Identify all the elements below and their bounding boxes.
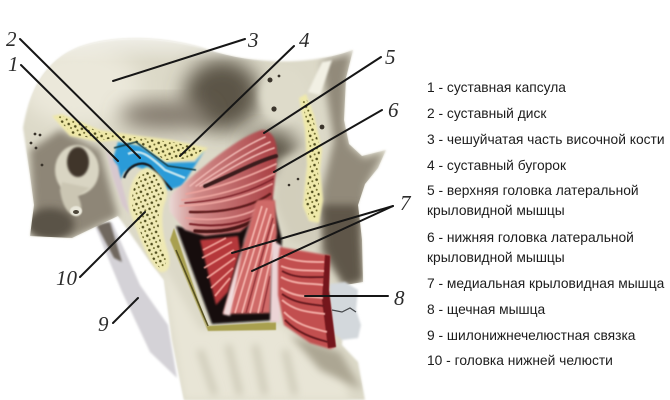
legend: 4 - суставный бугорок [427,158,567,173]
buccinator muscle [278,247,336,349]
number labels on the drawing: 6 [388,98,399,122]
legend: крыловидной мышцы [427,203,565,218]
mandibular head [129,167,170,272]
number labels on the drawing [6,27,412,336]
legend: 10 - головка нижней челюсти [427,353,613,368]
lateral pterygoid upper and lower heads [169,130,277,236]
illustration: skull anatomy [0,30,386,400]
number labels on the drawing: 10 [56,266,78,290]
teeth [330,282,361,340]
legend: 7 - медиальная крыловидная мышца [427,276,665,291]
temporal bone section [52,114,208,162]
number labels on the drawing: 5 [385,45,396,69]
legend: крыловидной мышцы [427,250,565,265]
muscle window [170,190,282,331]
number labels on the drawing: 8 [394,286,405,310]
medial pterygoid [200,200,277,316]
legend: 3 - чешуйчатая часть височной кости [427,132,665,147]
stylomandibular ligament [95,222,177,378]
number labels on the drawing: 7 [400,191,412,215]
ear canal [55,145,99,216]
legend [427,80,665,368]
legend: 9 - шилонижнечелюстная связка [427,328,636,343]
legend: 5 - верхняя головка латеральной [427,183,639,198]
legend: 1 - суставная капсула [427,80,566,95]
articular capsule and disc [106,142,205,215]
legend: 6 - нижняя головка латеральной [427,230,634,245]
callout lines [20,39,393,323]
vertical bone section [299,94,323,223]
number labels on the drawing: 9 [98,312,109,336]
number labels on the drawing: 2 [6,27,17,51]
number labels on the drawing: 4 [299,28,310,52]
pale connective strip [270,240,282,322]
skull bone [0,30,386,400]
legend: 8 - щечная мышца [427,302,546,317]
foramina dots [30,75,324,186]
number labels on the drawing: 3 [247,28,258,52]
legend: 2 - суставный диск [427,106,547,121]
number labels on the drawing: 1 [8,52,18,76]
